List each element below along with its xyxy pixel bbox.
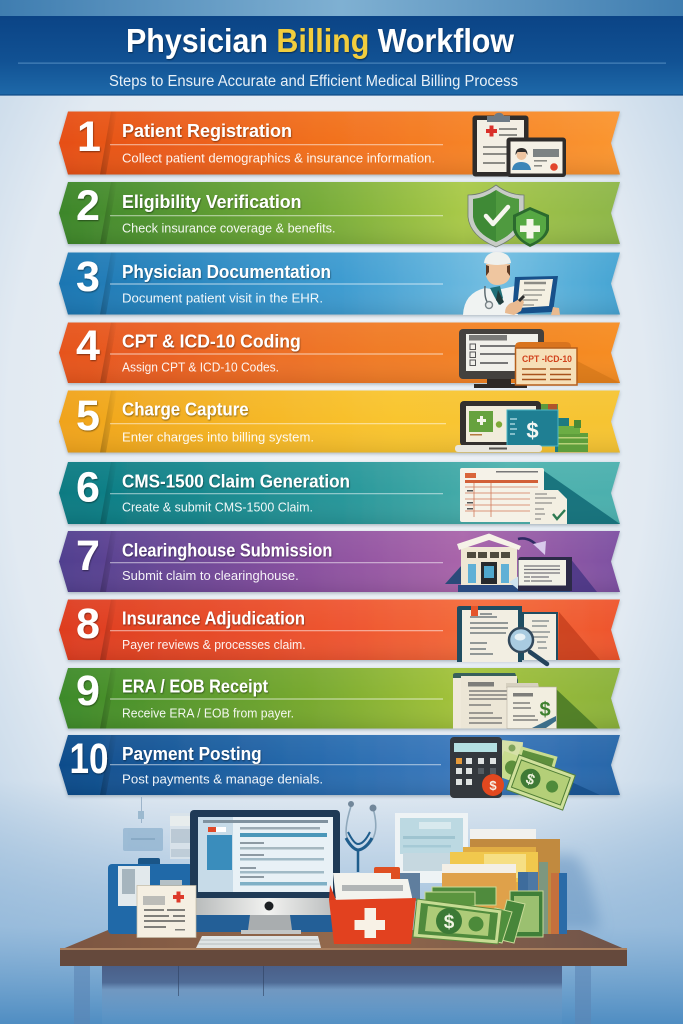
red first aid file box	[329, 867, 420, 944]
desk	[60, 930, 627, 1024]
wall ID badge	[123, 797, 163, 851]
step 1 ribbon: Patient Registration: 1	[77, 113, 101, 161]
step 9 ribbon: ERA / EOB Receipt	[59, 667, 620, 728]
icon: ERA and EOB documents	[453, 673, 598, 728]
step 5 ribbon: Charge Capture	[59, 390, 620, 452]
step 3 ribbon: Physician Documentation: Physician Documentation	[122, 262, 331, 282]
blue medical folder	[108, 858, 193, 934]
step 3 ribbon: Physician Documentation: Document patient visit in the EHR.	[122, 290, 323, 305]
step 3 ribbon: Physician Documentation: 3	[76, 253, 100, 301]
step 8 ribbon: Insurance Adjudication: Payer reviews & processes claim.	[122, 637, 306, 652]
patient form card	[137, 886, 196, 938]
step 4 ribbon: CPT & ICD-10 Coding	[59, 322, 620, 383]
icon: monitor and CPT ICD-10 code folder	[459, 329, 620, 388]
step 1 ribbon: Patient Registration	[59, 112, 620, 174]
icon: laptop with dollar card and money stacks: $	[526, 418, 539, 443]
monitor	[190, 810, 342, 934]
step 2 ribbon: Eligibility Verification	[59, 182, 620, 244]
keyboard	[196, 936, 321, 948]
icon: ERA and EOB documents: $	[539, 699, 551, 721]
step 8 ribbon: Insurance Adjudication: Insurance Adjudication	[122, 608, 305, 628]
file folders	[442, 829, 567, 934]
step 6 ribbon: CMS-1500 Claim Generation: CMS-1500 Claim Generation	[122, 472, 350, 492]
step 6 ribbon: CMS-1500 Claim Generation: Create & submit CMS-1500 Claim.	[122, 500, 313, 515]
step 5 ribbon: Charge Capture: Enter charges into billing system.	[122, 430, 314, 445]
icon: calculator and cash: $	[489, 778, 497, 793]
stethoscope	[346, 801, 376, 872]
front dollar bill: $	[444, 912, 455, 933]
step 1 ribbon: Patient Registration: Patient Registration	[122, 121, 292, 141]
desk scene illustration	[60, 797, 627, 1024]
step 10 ribbon: Payment Posting: Payment Posting	[122, 744, 262, 764]
stack of dollar bills	[413, 887, 543, 944]
icon: laptop with dollar card and money stacks	[455, 401, 588, 452]
wall chart board	[395, 813, 468, 883]
step 8 ribbon: Insurance Adjudication	[59, 600, 620, 660]
wall paper	[170, 813, 191, 859]
step 4 ribbon: CPT & ICD-10 Coding: CPT & ICD-10 Coding	[122, 332, 301, 352]
icon: doctor with clipboard	[463, 252, 560, 315]
step 10 ribbon: Payment Posting	[59, 735, 620, 795]
step 2 ribbon: Eligibility Verification: Check insurance coverage & benefits.	[122, 221, 336, 236]
wall shadow	[470, 855, 600, 930]
icon: calculator and cash	[450, 737, 600, 810]
icon: CMS-1500 claim form and checked document	[460, 468, 620, 524]
step 8 ribbon: Insurance Adjudication: 8	[76, 600, 100, 648]
step 7 ribbon: Clearinghouse Submission: Clearinghouse Submission	[122, 541, 332, 561]
step 5 ribbon: Charge Capture: 5	[76, 392, 100, 440]
icon: open document with magnifying glass	[457, 606, 600, 664]
title: Physician Billing Workflow	[126, 22, 514, 59]
step 4 ribbon: CPT & ICD-10 Coding: 4	[76, 322, 100, 370]
step 4 ribbon: CPT & ICD-10 Coding: Assign CPT & ICD-10 Codes.	[122, 360, 279, 375]
icon: clearinghouse building with document and arrows	[445, 534, 597, 592]
step 6 ribbon: CMS-1500 Claim Generation: 6	[76, 464, 100, 512]
step 7 ribbon: Clearinghouse Submission	[59, 531, 620, 592]
step 1 ribbon: Patient Registration: Collect patient demographics & insurance information.	[122, 150, 435, 165]
step 3 ribbon: Physician Documentation	[59, 252, 620, 314]
step 9 ribbon: ERA / EOB Receipt: Receive ERA / EOB from payer.	[122, 705, 294, 720]
icon: clipboard and ID card	[472, 113, 566, 177]
header banner	[0, 16, 683, 96]
icon: calculator and cash: $	[523, 770, 538, 789]
step 2 ribbon: Eligibility Verification: Eligibility Verification	[122, 192, 302, 212]
step 6 ribbon: CMS-1500 Claim Generation	[59, 462, 620, 524]
step 2 ribbon: Eligibility Verification: 2	[76, 182, 100, 230]
step 9 ribbon: ERA / EOB Receipt: ERA / EOB Receipt	[122, 677, 268, 697]
step 5 ribbon: Charge Capture: Charge Capture	[122, 400, 249, 420]
step 7 ribbon: Clearinghouse Submission: Submit claim to clearinghouse.	[122, 568, 299, 583]
step 7 ribbon: Clearinghouse Submission: 7	[76, 532, 100, 580]
icon: shield with check and plus badge	[468, 185, 549, 247]
subtitle: Steps to Ensure Accurate and Efficient Medical Billing Process	[109, 73, 518, 90]
step 10 ribbon: Payment Posting: Post payments & manage denials.	[122, 771, 323, 786]
step 10 ribbon: Payment Posting: 10	[70, 735, 108, 783]
icon: monitor and CPT ICD-10 code folder: CPT -ICD-10	[522, 354, 572, 365]
step 9 ribbon: ERA / EOB Receipt: 9	[76, 667, 100, 715]
